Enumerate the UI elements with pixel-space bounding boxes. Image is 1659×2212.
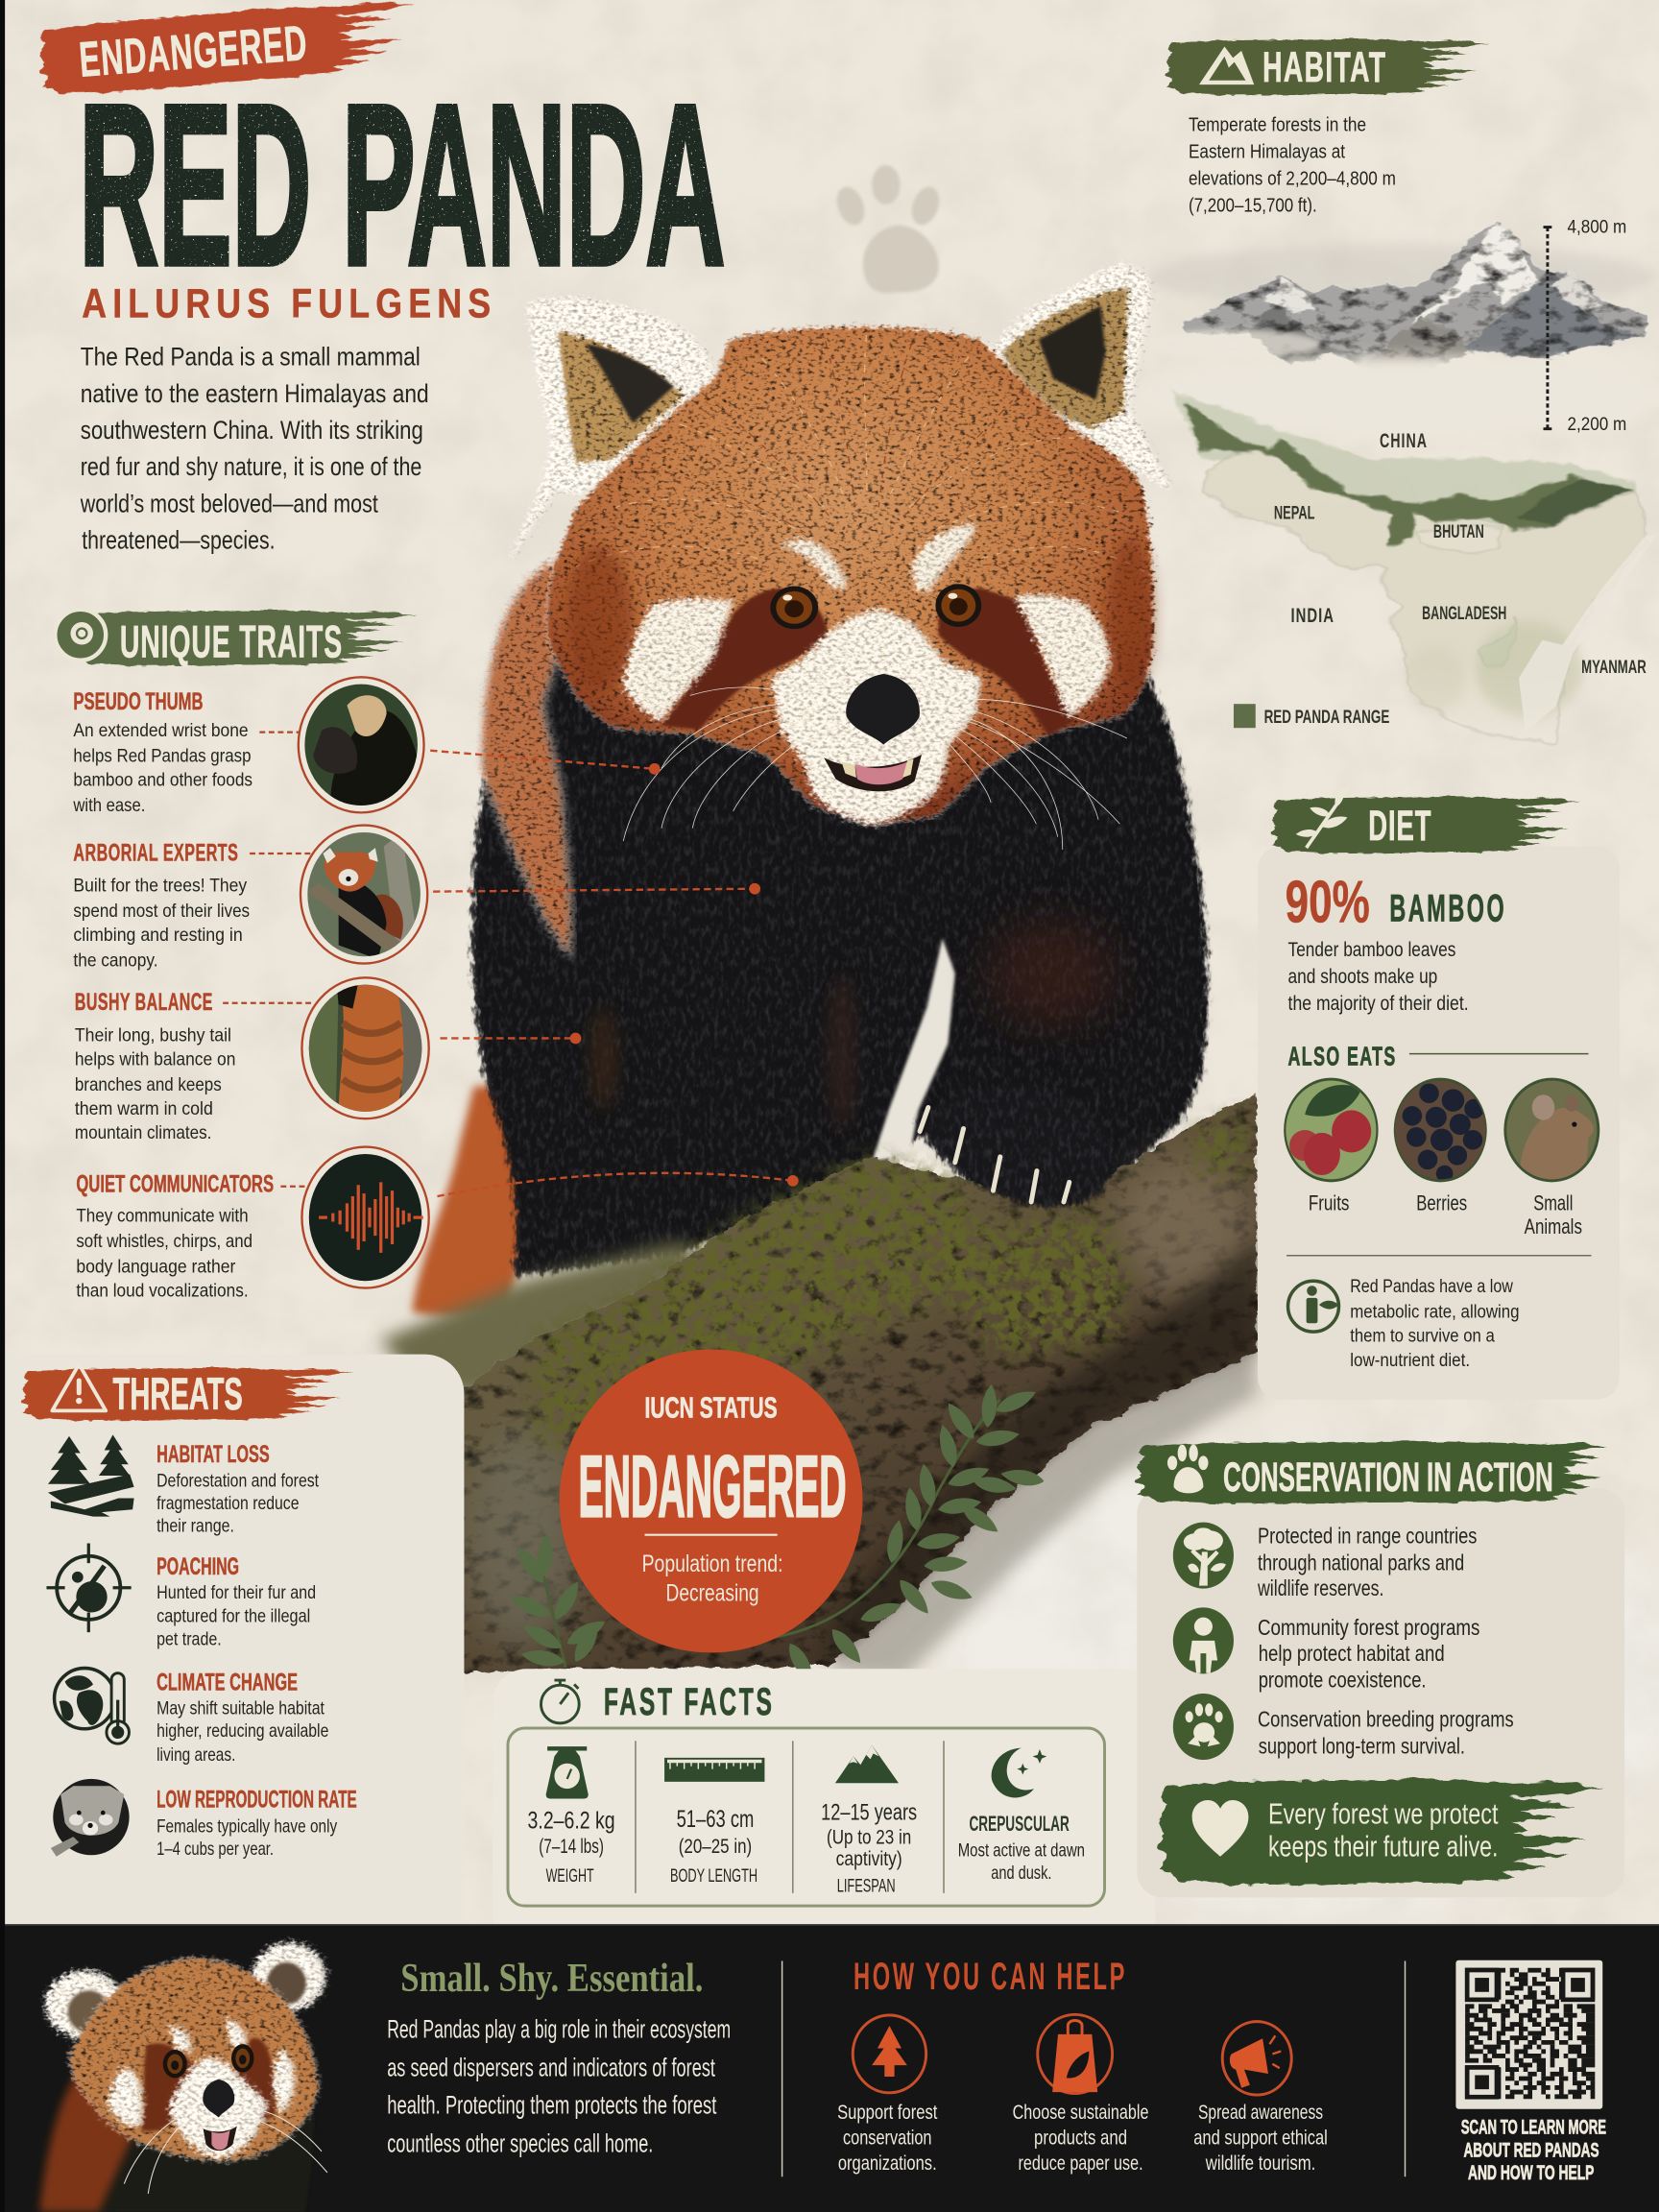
status badge: IUCN: Decreasing xyxy=(666,1580,759,1607)
ecosystem text: countless other species call home. xyxy=(387,2129,653,2158)
threat: low reproduction rate: LOW REPRODUCTION RATE xyxy=(156,1786,357,1813)
intro text: The Red Panda is a small mammal xyxy=(81,343,421,372)
help: support forest: organizations. xyxy=(838,2152,937,2175)
icon: scale xyxy=(546,1746,589,1798)
panda orange shoulder xyxy=(480,557,571,959)
icon: paw xyxy=(1173,1694,1234,1760)
elevation scale xyxy=(1544,216,1626,435)
icon: paw xyxy=(1167,1445,1209,1493)
map legend xyxy=(1234,704,1389,728)
trait: bushy balance: mountain climates. xyxy=(75,1122,211,1143)
icon: shopping bag xyxy=(1038,2014,1113,2094)
panel: conservation in action xyxy=(1135,1442,1624,1897)
map labels: CHINA xyxy=(1380,429,1428,452)
stat: 90% bamboo xyxy=(1286,869,1506,935)
food: small animals xyxy=(1503,1077,1599,1234)
map labels: NEPAL xyxy=(1274,503,1314,524)
panda whiskers xyxy=(623,687,1127,850)
icon: globe and thermometer xyxy=(55,1669,129,1743)
trait: bushy balance: helps with balance on xyxy=(75,1048,235,1070)
gap between forelegs xyxy=(872,938,955,1163)
fact: body length xyxy=(664,1758,764,1887)
trait: pseudo thumb: An extended wrist bone xyxy=(73,720,249,741)
callout: every forest xyxy=(1157,1779,1604,1886)
ecosystem text: health. Protecting them protects the forest xyxy=(387,2091,717,2120)
trait: arborial experts: spend most of their lives xyxy=(73,901,250,922)
intro text xyxy=(80,343,429,555)
icon: stopwatch xyxy=(541,1680,579,1723)
threat: poaching: pet trade. xyxy=(156,1628,222,1649)
panel: fast facts: FAST FACTS xyxy=(604,1681,775,1723)
threat: habitat loss: HABITAT LOSS xyxy=(156,1441,270,1468)
heading: habitat xyxy=(1165,39,1490,95)
help: support forest: conservation xyxy=(843,2126,932,2149)
threat: climate change: May shift suitable habitat xyxy=(156,1697,325,1719)
diet text: Tender bamboo leaves xyxy=(1288,938,1455,961)
icon: metabolism xyxy=(1288,1281,1338,1332)
trait: quiet communicators xyxy=(76,1147,429,1301)
panda nose and mouth xyxy=(824,674,922,791)
threat: habitat loss: their range. xyxy=(156,1516,234,1537)
food: small animals: Animals xyxy=(1525,1214,1582,1238)
heading: conservation xyxy=(1135,1442,1607,1503)
action: protected areas xyxy=(1173,1523,1477,1600)
heading: threats xyxy=(21,1364,354,1421)
habitat text: (7,200–15,700 ft). xyxy=(1189,194,1317,216)
food: small animals: Small xyxy=(1533,1191,1573,1215)
action: protected areas: through national parks and xyxy=(1258,1550,1464,1575)
icon: warning triangle xyxy=(52,1364,106,1410)
intro text: red fur and shy nature, it is one of the xyxy=(81,452,421,481)
food: fruits: Fruits xyxy=(1309,1191,1349,1215)
food: fruits xyxy=(1277,1072,1389,1215)
trait: quiet communicators: They communicate with xyxy=(76,1205,249,1226)
subtitle: AILURUS FULGENS xyxy=(82,281,496,327)
heading: unique traits: UNIQUE TRAITS xyxy=(120,616,343,667)
heading: unique traits xyxy=(55,610,418,667)
fact: crepuscular: and dusk. xyxy=(991,1863,1051,1884)
help: sustainable products: products and xyxy=(1034,2126,1127,2149)
trait: pseudo thumb: helps Red Pandas grasp xyxy=(73,745,252,766)
fact: lifespan: 12–15 years xyxy=(821,1800,917,1826)
icon: mountain xyxy=(1199,46,1254,84)
diet note: them to survive on a xyxy=(1350,1325,1496,1346)
head fur strands xyxy=(575,331,1148,610)
left ear xyxy=(509,298,714,563)
panel: threats backing xyxy=(0,1355,464,1954)
page edge strip xyxy=(0,0,5,2212)
fact: crepuscular: Most active at dawn xyxy=(958,1840,1085,1862)
illustration: red panda portrait xyxy=(39,1942,327,2212)
trait: quiet communicators: than loud vocalizations. xyxy=(76,1280,249,1301)
icon: tree xyxy=(853,2015,926,2093)
fact: body length: 51–63 cm xyxy=(677,1806,754,1833)
trait: arborial experts xyxy=(73,826,430,972)
panda body xyxy=(472,592,1208,1277)
threat: habitat loss: Deforestation and forest xyxy=(156,1471,320,1492)
threat: low reproduction rate: 1–4 cubs per year. xyxy=(156,1839,274,1860)
map labels: BANGLADESH xyxy=(1422,603,1506,624)
right ear xyxy=(991,262,1172,490)
leafy vines xyxy=(508,1383,1046,1685)
trait: bushy balance xyxy=(75,976,430,1143)
trait: quiet communicators: soft whistles, chirps, and xyxy=(76,1231,252,1252)
threat: climate change: living areas. xyxy=(156,1744,235,1766)
illustration: habitat mountains and map xyxy=(1133,220,1659,745)
threat: low reproduction rate xyxy=(51,1779,357,1860)
fact: lifespan xyxy=(821,1745,917,1896)
map labels xyxy=(1274,429,1647,678)
icon: heart xyxy=(1192,1800,1248,1857)
panda right paw and claws xyxy=(917,1085,1113,1207)
trait: arborial experts: ARBORIAL EXPERTS xyxy=(73,839,238,866)
fact: body length: (20–25 in) xyxy=(679,1835,752,1858)
callout dots xyxy=(570,763,799,1187)
trait: pseudo thumb: PSEUDO THUMB xyxy=(73,688,204,715)
heading: also eats: ALSO EATS xyxy=(1288,1041,1397,1070)
trait: quiet communicators: body language rather xyxy=(76,1256,236,1277)
fact: lifespan: (Up to 23 in xyxy=(827,1825,911,1848)
habitat text xyxy=(1189,114,1396,216)
trait: quiet communicators: QUIET COMMUNICATORS xyxy=(76,1171,274,1198)
action: community forest: help protect habitat and xyxy=(1259,1641,1445,1666)
threat: habitat loss: fragmestation reduce xyxy=(156,1493,300,1514)
status badge: IUCN: IUCN STATUS xyxy=(645,1391,778,1425)
heading: small shy essential: Small. Shy. Essential. xyxy=(400,1956,703,2001)
diet note xyxy=(1350,1276,1520,1371)
trait: pseudo thumb: with ease. xyxy=(73,795,145,816)
action: breeding programs: Conservation breeding programs xyxy=(1258,1707,1514,1732)
action: breeding programs xyxy=(1173,1694,1514,1760)
trait: pseudo thumb xyxy=(73,677,424,818)
habitat text: elevations of 2,200–4,800 m xyxy=(1189,167,1396,189)
icon: tree xyxy=(1173,1523,1234,1589)
panel: fast facts backing xyxy=(493,1669,1155,1951)
callout: every forest: Every forest we protect xyxy=(1268,1796,1499,1830)
heading: how you can help: HOW YOU CAN HELP xyxy=(854,1956,1127,1998)
face markings xyxy=(565,537,1153,736)
threat: poaching: captured for the illegal xyxy=(156,1605,310,1626)
intro text: threatened—species. xyxy=(82,526,276,555)
stat: 90% bamboo: 90% xyxy=(1286,869,1370,935)
panel: bottom band xyxy=(0,1924,1659,2212)
fact: weight: 3.2–6.2 kg xyxy=(528,1807,615,1834)
trait: arborial experts: Built for the trees! They xyxy=(73,876,247,897)
heading: diet xyxy=(1271,785,1580,854)
diet text: the majority of their diet. xyxy=(1288,992,1469,1015)
icon: sound waveform xyxy=(319,1182,423,1253)
intro text: native to the eastern Himalayas and xyxy=(81,379,429,408)
red panda illustration xyxy=(381,262,1257,1679)
diet note: low-nutrient diet. xyxy=(1350,1350,1470,1371)
threat: poaching: POACHING xyxy=(156,1553,239,1580)
text: RED PANDA xyxy=(79,59,725,313)
icon: crosshair xyxy=(46,1544,132,1632)
food: berries: Berries xyxy=(1416,1191,1467,1215)
diet note: Red Pandas have a low xyxy=(1350,1276,1513,1297)
action: breeding programs: support long-term survival. xyxy=(1259,1733,1465,1758)
icon: megaphone xyxy=(1222,2022,1291,2095)
icon: bamboo sprig xyxy=(1295,785,1349,848)
threat: climate change: higher, reducing available xyxy=(156,1720,328,1742)
ecosystem text: Red Pandas play a big role in their ecosystem xyxy=(387,2015,731,2044)
icon: moon and stars xyxy=(992,1748,1046,1797)
map labels: BHUTAN xyxy=(1433,521,1484,542)
help: spread awareness xyxy=(1193,2022,1328,2175)
panda head xyxy=(509,262,1172,850)
trait: arborial experts: climbing and resting in xyxy=(73,925,243,946)
habitat text: Temperate forests in the xyxy=(1189,114,1366,136)
head fur xyxy=(547,325,1154,826)
fact: weight: (7–14 lbs) xyxy=(539,1835,604,1858)
trait: arborial experts: the canopy. xyxy=(73,950,158,972)
threat: poaching xyxy=(46,1544,316,1649)
help: support forest: Support forest xyxy=(837,2101,937,2124)
help: spread awareness: Spread awareness xyxy=(1198,2101,1323,2124)
heading: threats: THREATS xyxy=(113,1368,243,1419)
trait: pseudo thumb: bamboo and other foods xyxy=(73,769,252,790)
status badge: IUCN xyxy=(560,1349,863,1652)
elevation scale: 4,800 m xyxy=(1567,216,1626,237)
panel: fast facts xyxy=(508,1680,1105,1906)
callout lines to panda xyxy=(430,751,793,1196)
diet note: metabolic rate, allowing xyxy=(1350,1301,1520,1322)
branch with moss xyxy=(381,1094,1257,1679)
trait: bushy balance: them warm in cold xyxy=(75,1098,213,1119)
heading: habitat: HABITAT xyxy=(1262,44,1386,91)
threat: climate change xyxy=(55,1669,328,1766)
icon: trees and logs xyxy=(48,1434,134,1517)
ecosystem text: as seed dispersers and indicators of forest xyxy=(387,2053,715,2081)
icon: people xyxy=(1173,1607,1234,1673)
fact: weight xyxy=(528,1746,615,1887)
diet text: and shoots make up xyxy=(1288,965,1437,988)
QR code xyxy=(1455,1960,1602,2109)
icon: faint paw print watermark xyxy=(832,165,944,294)
help: spread awareness: and support ethical xyxy=(1193,2126,1328,2149)
heading: diet: DIET xyxy=(1368,803,1431,850)
QR caption xyxy=(1461,2116,1606,2184)
action: protected areas: wildlife reserves. xyxy=(1257,1575,1383,1600)
tail xyxy=(412,1086,525,1316)
fact: crepuscular: CREPUSCULAR xyxy=(969,1812,1070,1836)
fact: weight: WEIGHT xyxy=(546,1865,594,1887)
panel: diet xyxy=(1258,785,1620,1400)
help: sustainable products: reduce paper use. xyxy=(1019,2152,1143,2175)
trait: bushy balance: BUSHY BALANCE xyxy=(75,989,213,1016)
fact: crepuscular xyxy=(958,1748,1085,1884)
map labels: INDIA xyxy=(1290,604,1334,627)
diet text xyxy=(1288,938,1469,1015)
threat: poaching: Hunted for their fur and xyxy=(156,1582,316,1603)
fact: body length: BODY LENGTH xyxy=(670,1865,757,1887)
QR caption: AND HOW TO HELP xyxy=(1468,2161,1594,2184)
action: protected areas: Protected in range countries xyxy=(1258,1524,1477,1549)
stat: 90% bamboo: BAMBOO xyxy=(1389,888,1506,930)
panda eyes xyxy=(770,584,981,629)
icon: magnifier ring xyxy=(55,610,106,661)
action: community forest: promote coexistence. xyxy=(1259,1667,1427,1692)
trait: bushy balance: branches and keeps xyxy=(75,1074,222,1095)
action: community forest xyxy=(1173,1607,1479,1692)
callout: every forest: keeps their future alive. xyxy=(1268,1830,1498,1863)
status badge: IUCN: Population trend: xyxy=(642,1551,783,1577)
icon: mountains xyxy=(835,1745,899,1783)
food: berries xyxy=(1394,1077,1487,1210)
threat: low reproduction rate: Females typically have only xyxy=(156,1816,337,1838)
badge: endangered: ENDANGERED xyxy=(78,14,309,87)
fact: lifespan: captivity) xyxy=(836,1847,902,1870)
elevation scale: 2,200 m xyxy=(1567,414,1626,435)
habitat text: Eastern Himalayas at xyxy=(1189,141,1345,163)
icon: ruler xyxy=(664,1758,764,1782)
threat: climate change: CLIMATE CHANGE xyxy=(156,1669,298,1695)
action: community forest: Community forest programs xyxy=(1258,1615,1479,1640)
threat: habitat loss xyxy=(48,1434,320,1537)
text: ENDANGERED xyxy=(578,1439,847,1536)
help: sustainable products xyxy=(1013,2014,1148,2175)
help: sustainable products: Choose sustainable xyxy=(1013,2101,1148,2124)
intro text: world’s most beloved—and most xyxy=(80,489,378,517)
map legend: RED PANDA RANGE xyxy=(1264,708,1389,728)
icon: red panda cub xyxy=(51,1779,130,1857)
help: support forest xyxy=(837,2015,937,2175)
ecosystem text xyxy=(387,2015,731,2158)
help: spread awareness: wildlife tourism. xyxy=(1205,2152,1315,2175)
intro text: southwestern China. With its striking xyxy=(81,416,423,445)
trait: bushy balance: Their long, bushy tail xyxy=(75,1024,231,1046)
fact: lifespan: LIFESPAN xyxy=(837,1875,896,1896)
